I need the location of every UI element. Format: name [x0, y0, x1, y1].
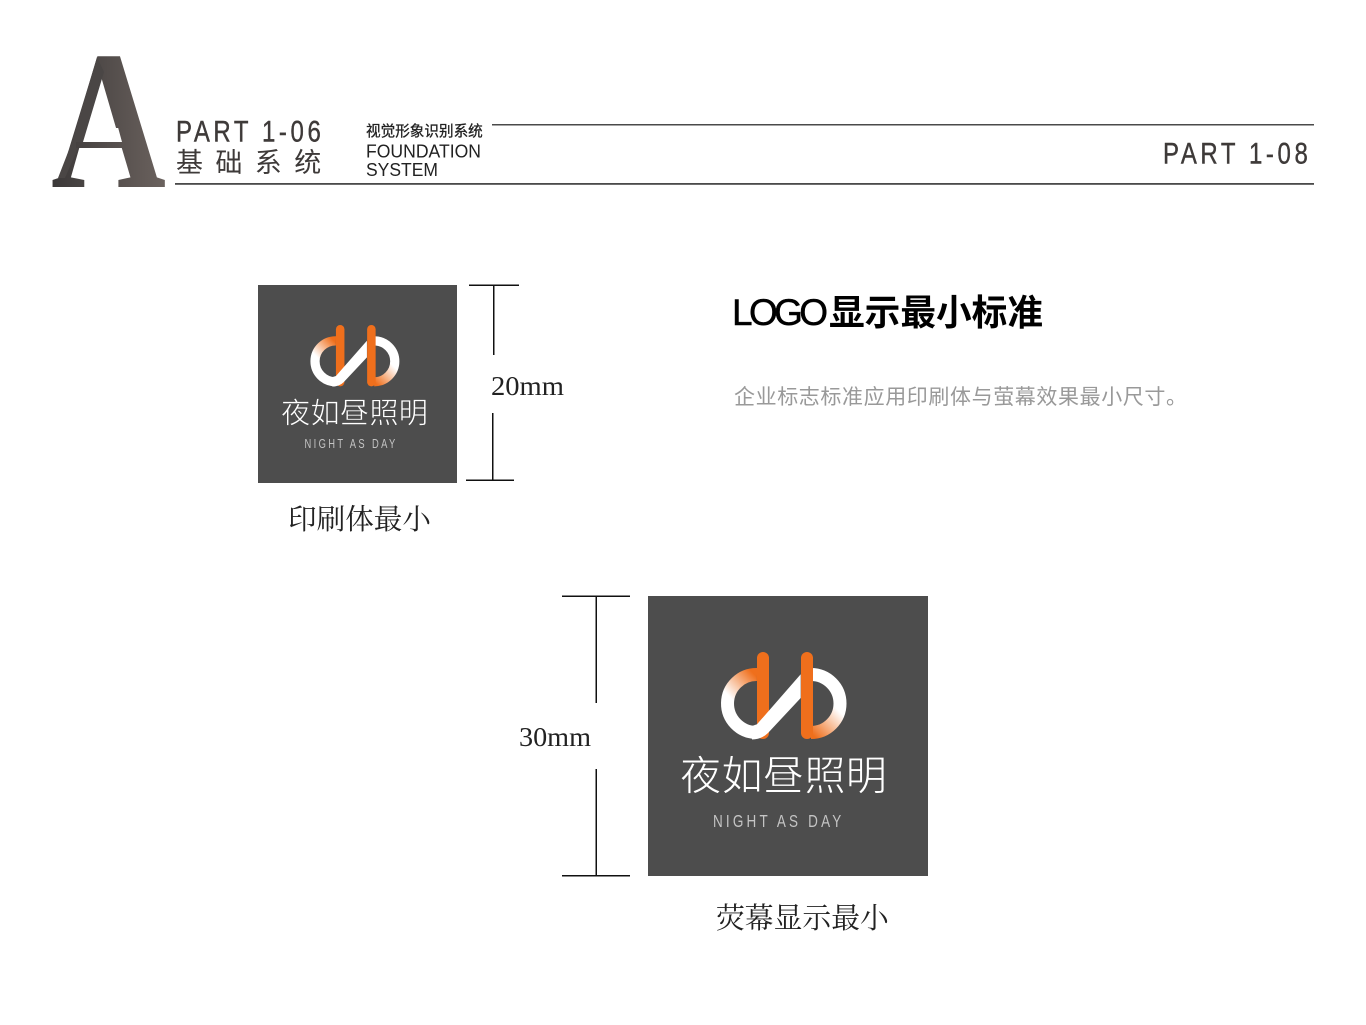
panel: print minimum size [258, 284, 564, 536]
heading: LOGO [732, 292, 828, 333]
icon: small logo mark [315, 325, 395, 387]
dimension 30mm lower line [596, 769, 597, 875]
section letter A: A [51, 11, 166, 230]
system title English line two: SYSTEM [366, 160, 438, 180]
dimension label 30mm: 30mm [519, 722, 591, 752]
system title Chinese: 视觉形象识别系统 [366, 123, 483, 140]
page number: PART 1-08 [1163, 136, 1308, 170]
panel: description [732, 292, 1188, 409]
dimension 20mm bottom tick [466, 480, 514, 481]
dimension 20mm top tick [469, 284, 519, 286]
dimension label 20mm: 20mm [491, 371, 564, 401]
icon: large logo mark [728, 652, 840, 740]
dimension 20mm lower line [492, 413, 494, 480]
part number: PART 1-06 [176, 114, 321, 148]
foundation system Chinese heading: 基础系统 [176, 148, 334, 178]
dimension 20mm upper line [493, 285, 494, 355]
dimension 30mm upper line [596, 596, 597, 703]
dimension 30mm bottom tick [562, 875, 630, 876]
large logo tile [648, 596, 928, 876]
panel: screen minimum size [519, 596, 928, 935]
header bottom rule [175, 183, 1314, 185]
small logo tile [258, 285, 457, 483]
dimension 30mm top tick [562, 596, 630, 597]
small logo wordmark: 夜如昼照明 [281, 397, 428, 430]
header [51, 11, 1314, 230]
large logo wordmark: 夜如昼照明 [680, 753, 887, 799]
heading [732, 292, 1043, 333]
large logo tagline: NIGHT AS DAY [713, 812, 842, 832]
body text: 企业标志标准应用印刷体与萤幕效果最小尺寸。 [734, 386, 1188, 409]
heading: 显示最小标准 [829, 292, 1043, 333]
caption print minimum: 印刷体最小 [288, 504, 432, 536]
caption screen minimum: 荧幕显示最小 [716, 903, 890, 935]
small logo tagline: NIGHT AS DAY [304, 438, 396, 451]
header top rule [492, 124, 1314, 126]
system title English: FOUNDATION [366, 142, 481, 162]
